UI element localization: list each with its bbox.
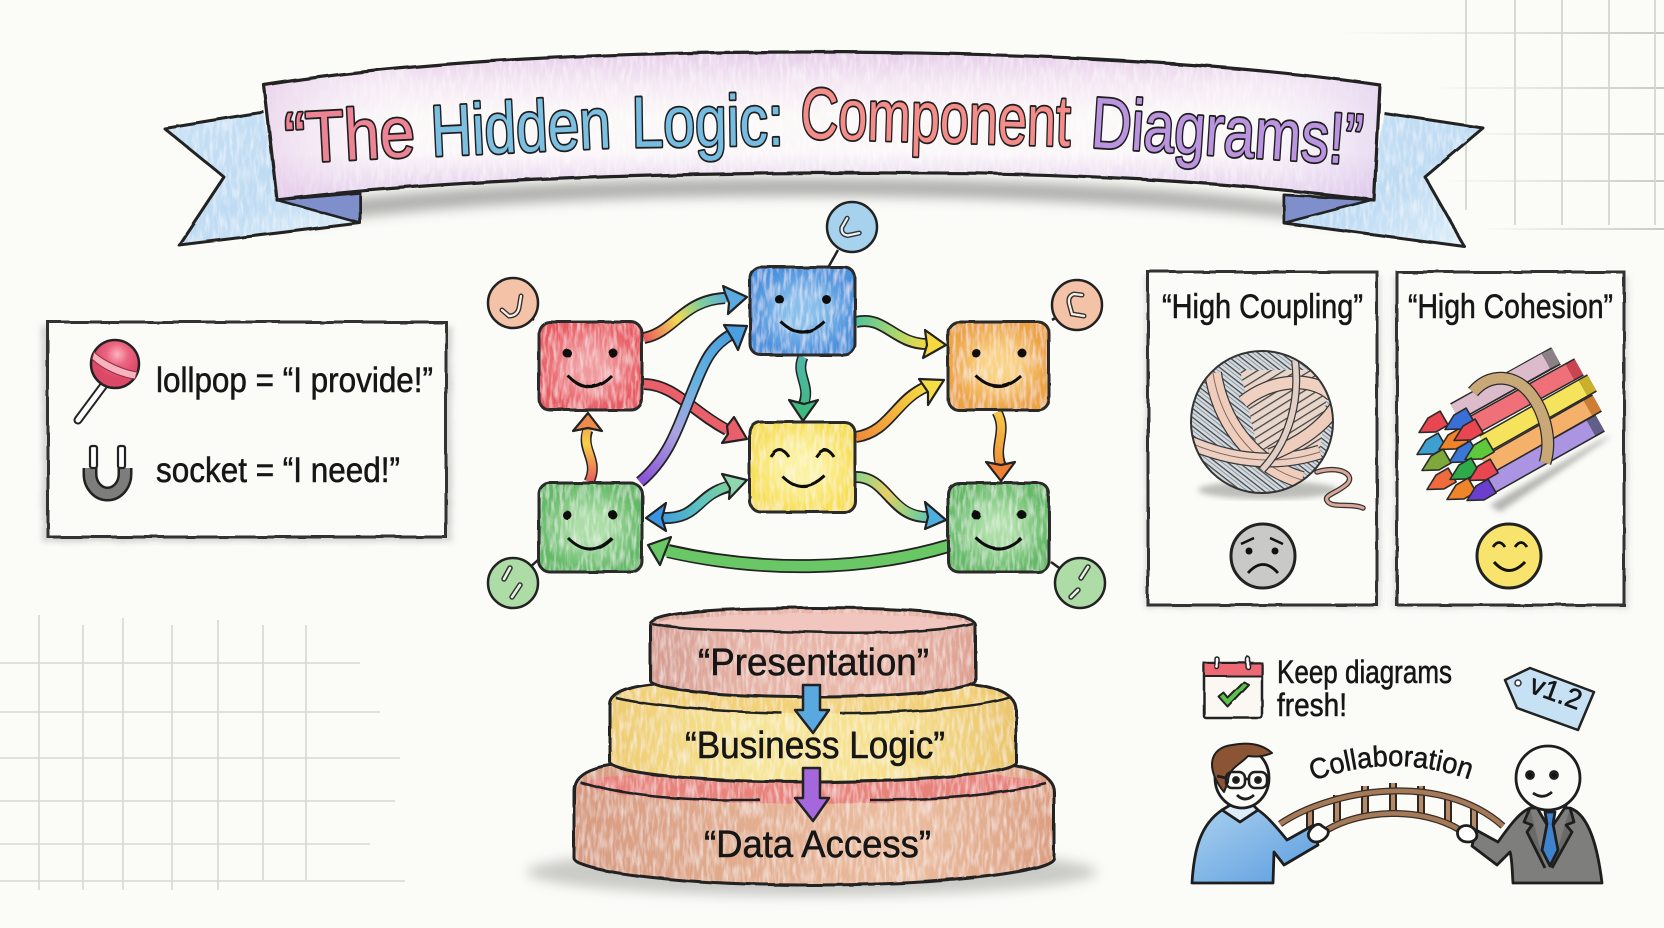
panel: legend lollipop and socket [42, 322, 452, 542]
panel: high coupling [1145, 272, 1381, 608]
component: green left [539, 483, 642, 572]
lollipop circle: green left [488, 558, 538, 608]
icon: socket [90, 446, 125, 494]
text: keep diagrams fresh: Keep diagrams [1277, 654, 1452, 690]
text: keep diagrams fresh [1277, 654, 1452, 723]
panel: high cohesion [1394, 272, 1628, 608]
arrow: yellow and green two way [646, 474, 747, 531]
heading: “High Coupling” [1162, 288, 1363, 326]
title text: Hidden [429, 84, 613, 172]
crayon bodies [1455, 356, 1600, 487]
right ribbon tail [1284, 113, 1483, 247]
component: yellow [750, 422, 855, 512]
arrow: business logic to data access [795, 768, 829, 821]
rubber band [1473, 378, 1548, 463]
component: red [539, 322, 642, 410]
icon: version tag [1505, 668, 1594, 730]
label: data access: “Data Access” [704, 824, 931, 866]
lollipop circle: green right [1055, 558, 1105, 608]
lollipop circle: peach left [488, 278, 538, 328]
arrow: blue to orange [856, 321, 946, 358]
label: business logic: “Business Logic” [685, 725, 945, 767]
arrow: presentation to business logic [795, 685, 829, 733]
banner shadow [300, 178, 1350, 224]
icon: lollipop [78, 340, 139, 420]
section: best practices [1190, 654, 1604, 884]
component: blue [750, 267, 855, 355]
icon: ladder bridge [1280, 783, 1503, 830]
arrow: orange to green [986, 412, 1015, 481]
component: orange [948, 322, 1049, 410]
legend box [42, 322, 452, 542]
lollipop circle: blue [827, 202, 877, 252]
tier: presentation [650, 608, 975, 697]
title text [283, 74, 1366, 181]
lollipop text: lollpop = “I provide!” [156, 361, 433, 400]
arrow: green to blue long [640, 325, 747, 482]
socket text: socket = “I need!” [156, 451, 400, 490]
arrow: red to yellow [644, 384, 747, 443]
layered cake diagram [527, 608, 1097, 896]
crayon tips [1413, 408, 1498, 507]
lollipop circle: peach right [1052, 280, 1102, 330]
title text: “The [283, 92, 417, 179]
icon: happy face [1477, 524, 1541, 588]
arrow: green to green [648, 537, 948, 566]
text: collaboration: Collaboration [1310, 745, 1472, 780]
title text: Component [800, 74, 1072, 162]
icon: version tag: v1.2 [1526, 669, 1586, 716]
text: keep diagrams fresh: fresh! [1277, 687, 1347, 723]
component: green right [948, 483, 1049, 572]
tier: business logic [610, 683, 1016, 782]
title text: Logic: [631, 81, 784, 163]
icon: calendar check [1204, 657, 1262, 718]
banner body [264, 52, 1380, 200]
connector stems [528, 250, 1062, 570]
arrow: blue to yellow [789, 357, 818, 421]
left ribbon tail [164, 112, 360, 245]
arrow: red to blue [644, 286, 747, 338]
figure: developer with glasses [1192, 744, 1328, 883]
grid lines bottom left [0, 615, 405, 890]
grid lines top right [1336, 0, 1664, 230]
label: presentation: “Presentation” [698, 642, 929, 684]
bundle shadow [1490, 436, 1612, 512]
icon: sad face [1231, 524, 1295, 588]
arrow: yellow to green [856, 477, 946, 529]
arrow: yellow to orange [856, 379, 944, 437]
cake shadow [527, 848, 1097, 896]
component network diagram [488, 202, 1105, 608]
arrow: green to red [573, 413, 602, 482]
title banner [164, 52, 1483, 247]
icon: yarn ball [1188, 351, 1363, 508]
figure: manager in suit [1457, 746, 1602, 883]
icon: crayon bundle [1413, 356, 1612, 512]
title text: Diagrams!” [1089, 83, 1366, 181]
heading: “High Cohesion” [1408, 288, 1613, 326]
tier: data access [574, 762, 1054, 885]
panel frame [1145, 272, 1381, 608]
panel frame [1394, 272, 1628, 608]
